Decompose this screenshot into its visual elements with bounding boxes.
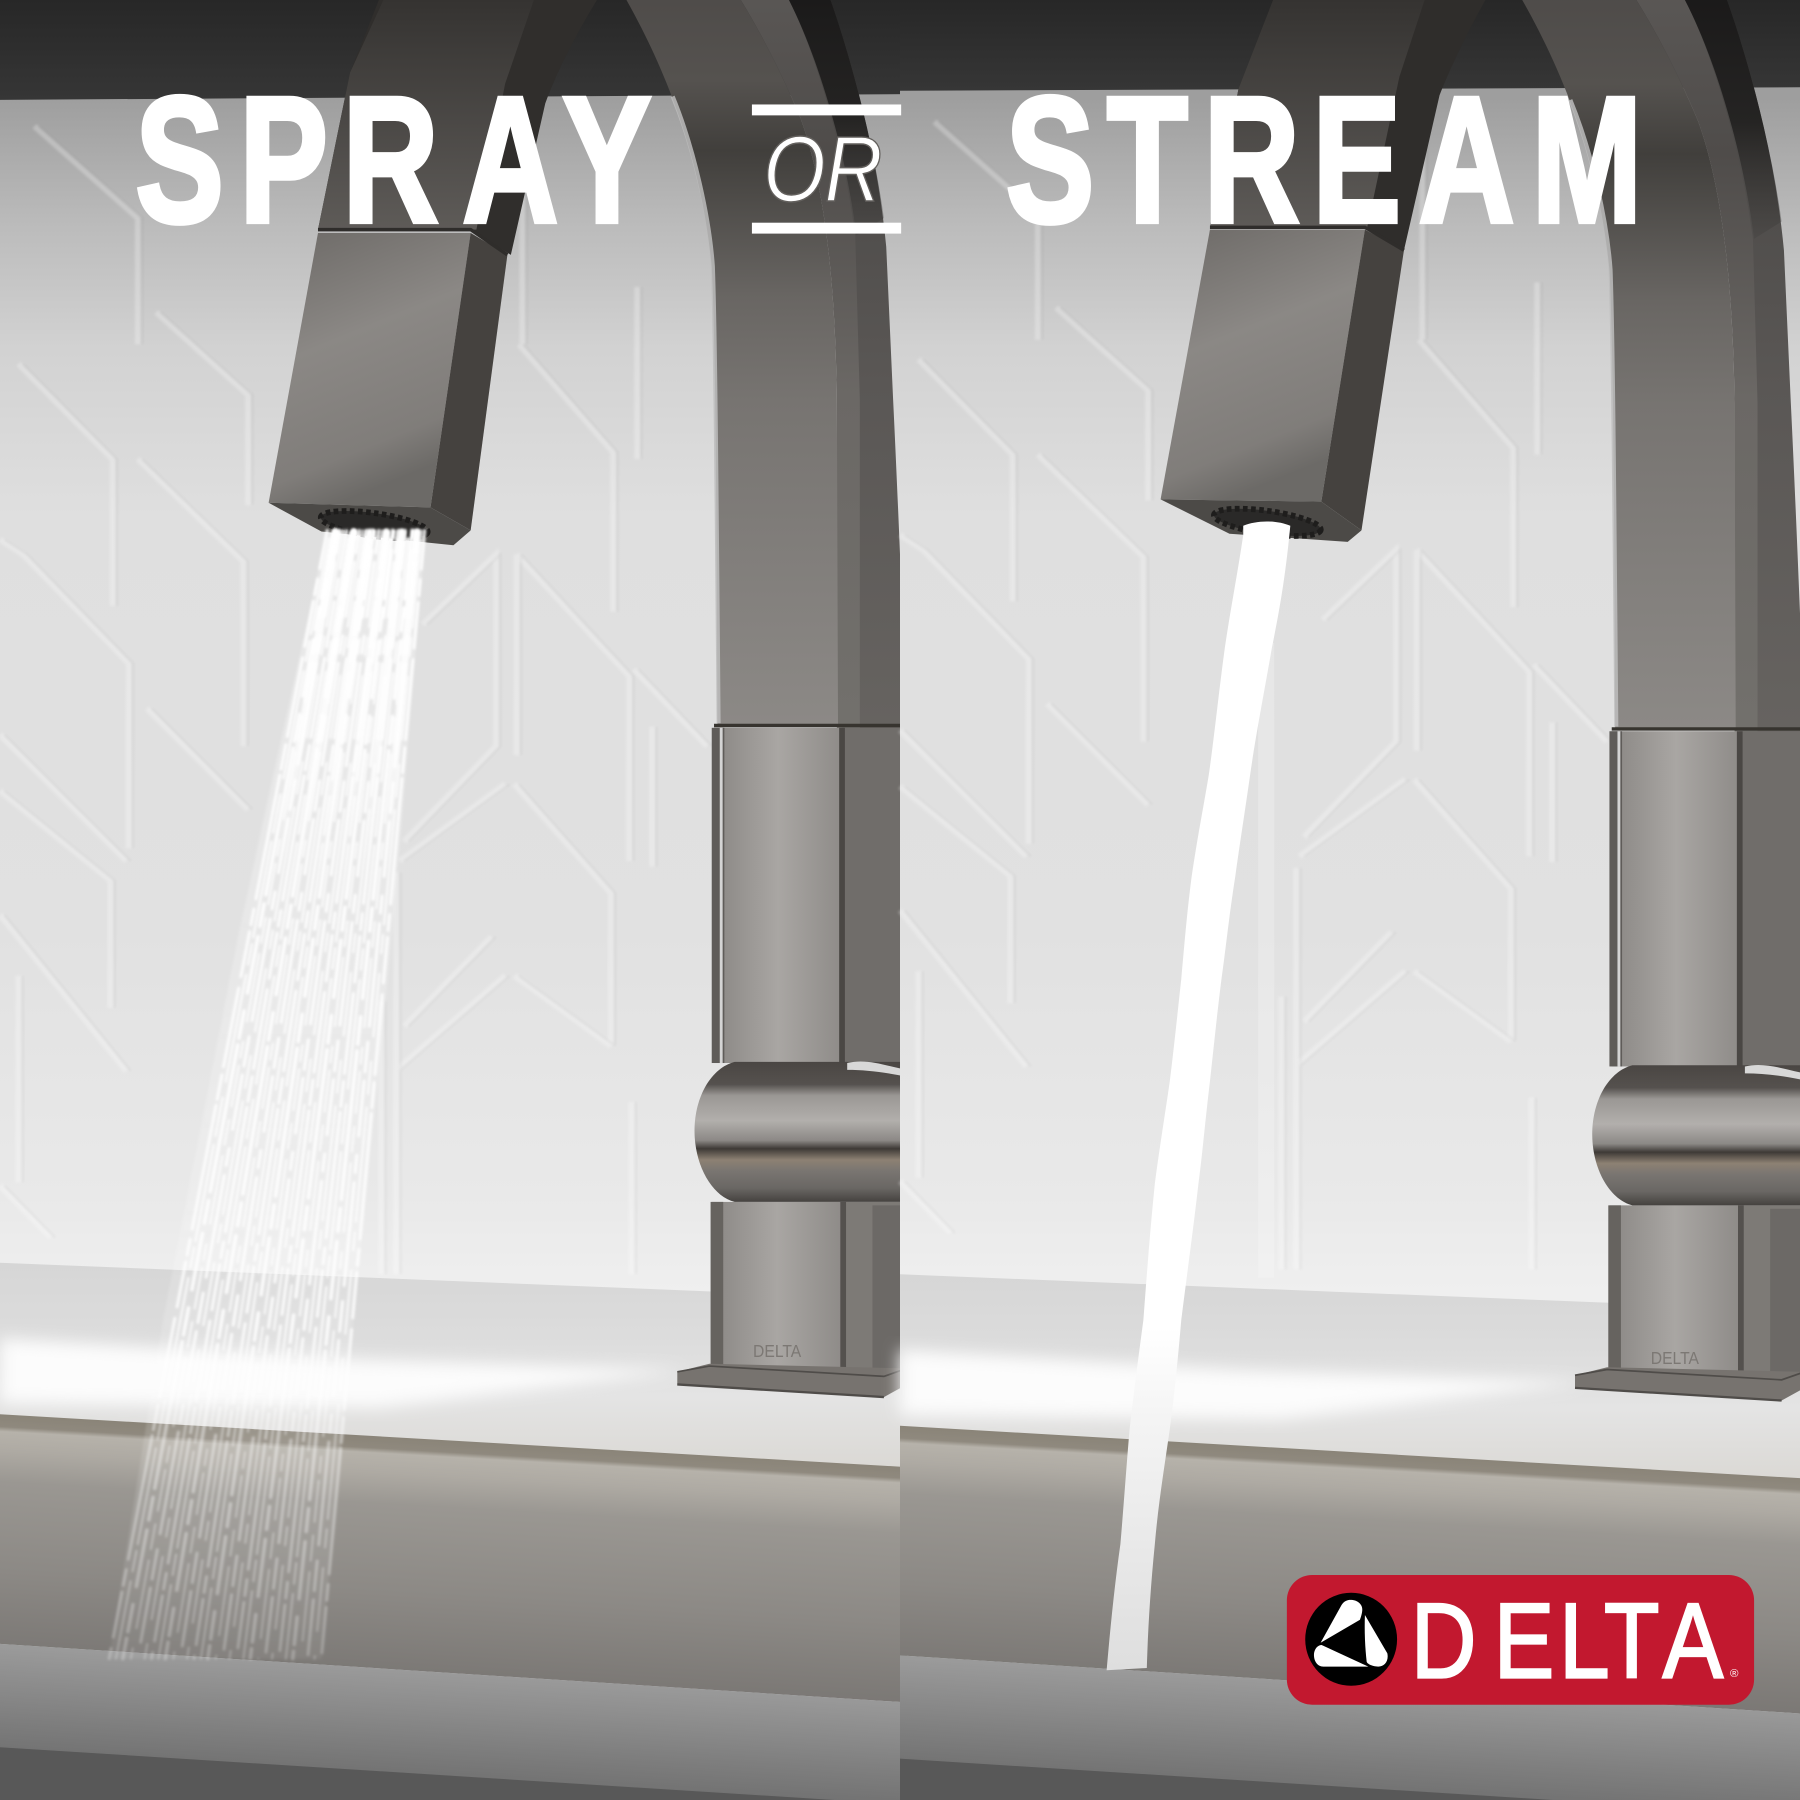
engraved faucet mark: DELTA bbox=[753, 1341, 802, 1361]
wall and ceiling bbox=[0, 0, 907, 1297]
panel: spray bbox=[0, 0, 907, 1800]
water spray bbox=[109, 530, 425, 1659]
or divider: OR bbox=[763, 117, 882, 221]
title: spray: SPRAY bbox=[135, 60, 651, 260]
water stream bbox=[1107, 521, 1290, 1670]
logo wordmark: DELTA bbox=[1411, 1581, 1723, 1700]
faucet stem bbox=[620, 0, 907, 1397]
title: stream: STREAM bbox=[1006, 60, 1642, 260]
faucet spray head bbox=[269, 230, 507, 545]
faucet stem bbox=[1518, 0, 1800, 1401]
faucet stream head bbox=[1161, 227, 1404, 542]
countertop and sink bbox=[0, 1263, 907, 1800]
wall and ceiling bbox=[900, 0, 1800, 1303]
faucet neck bbox=[1210, 0, 1485, 250]
engraved faucet mark: DELTA bbox=[1651, 1348, 1699, 1368]
panel: stream bbox=[900, 0, 1800, 1800]
icon: Delta triangle emblem bbox=[1305, 1593, 1397, 1686]
logo: Delta bbox=[1287, 1575, 1754, 1705]
faucet neck bbox=[318, 0, 597, 255]
countertop and sink bbox=[900, 1274, 1800, 1800]
registered mark: ® bbox=[1730, 1668, 1739, 1680]
or divider bbox=[752, 104, 901, 234]
